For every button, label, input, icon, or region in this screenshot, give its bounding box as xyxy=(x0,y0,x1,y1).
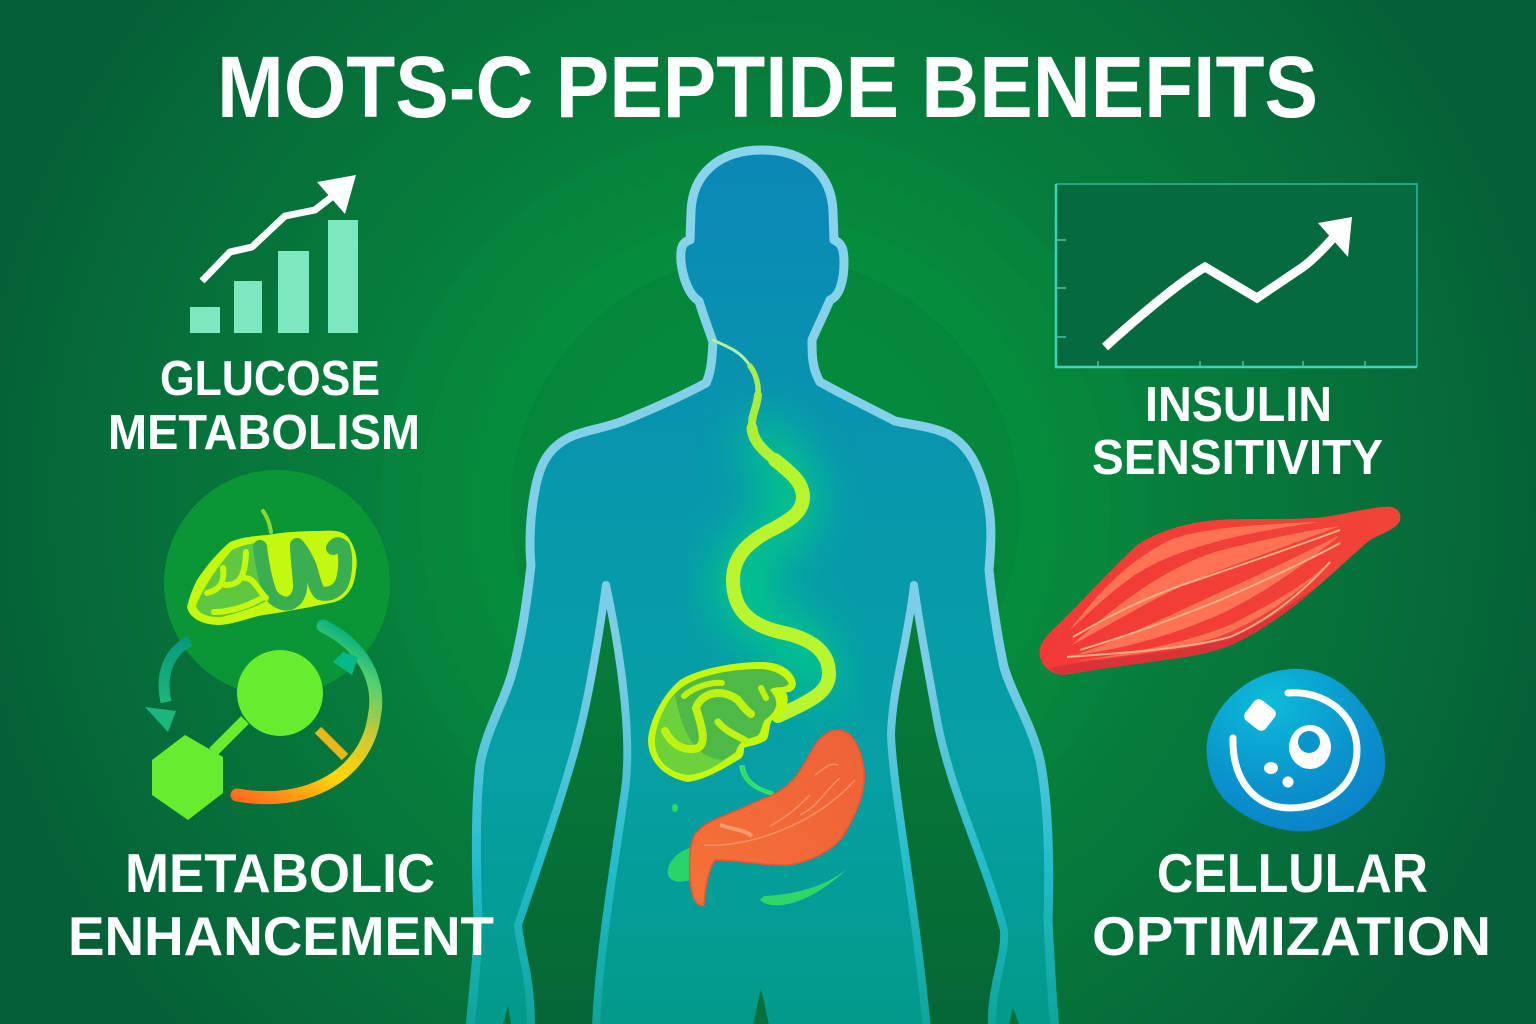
muscle illustration xyxy=(1040,507,1400,675)
glucose metabolism label xyxy=(108,352,420,460)
cycle arrows xyxy=(164,641,190,702)
metabolic enhancement label: ENHANCEMENT xyxy=(68,905,494,967)
mitochondrion xyxy=(187,511,357,625)
cellular optimization icon xyxy=(1207,669,1385,831)
small green accents xyxy=(668,766,848,905)
human body silhouette xyxy=(470,150,1055,1024)
insulin sensitivity label xyxy=(1092,378,1383,485)
glucose metabolism label: METABOLISM xyxy=(108,406,420,460)
insulin sensitivity label: SENSITIVITY xyxy=(1092,431,1383,485)
cellular optimization label: OPTIMIZATION xyxy=(1092,905,1491,967)
insulin sensitivity chart xyxy=(1056,184,1417,367)
metabolic enhancement icon xyxy=(145,470,390,820)
vine glow xyxy=(735,440,815,680)
cellular optimization label: CELLULAR xyxy=(1157,842,1428,904)
mitochondrion in body xyxy=(648,662,796,782)
cellular optimization label xyxy=(1092,842,1491,967)
title: MOTS-C PEPTIDE BENEFITS xyxy=(217,39,1318,136)
right arm gap xyxy=(891,585,1004,1024)
green pathway line xyxy=(713,340,829,716)
network nodes xyxy=(213,720,245,752)
insulin sensitivity label: INSULIN xyxy=(1145,378,1332,432)
metabolic enhancement label: METABOLIC xyxy=(125,842,435,904)
pancreas organ xyxy=(690,730,864,906)
glucose metabolism label: GLUCOSE xyxy=(160,352,380,406)
left arm gap xyxy=(518,585,627,1024)
metabolic enhancement label xyxy=(68,842,494,967)
glucose metabolism icon xyxy=(190,175,358,333)
